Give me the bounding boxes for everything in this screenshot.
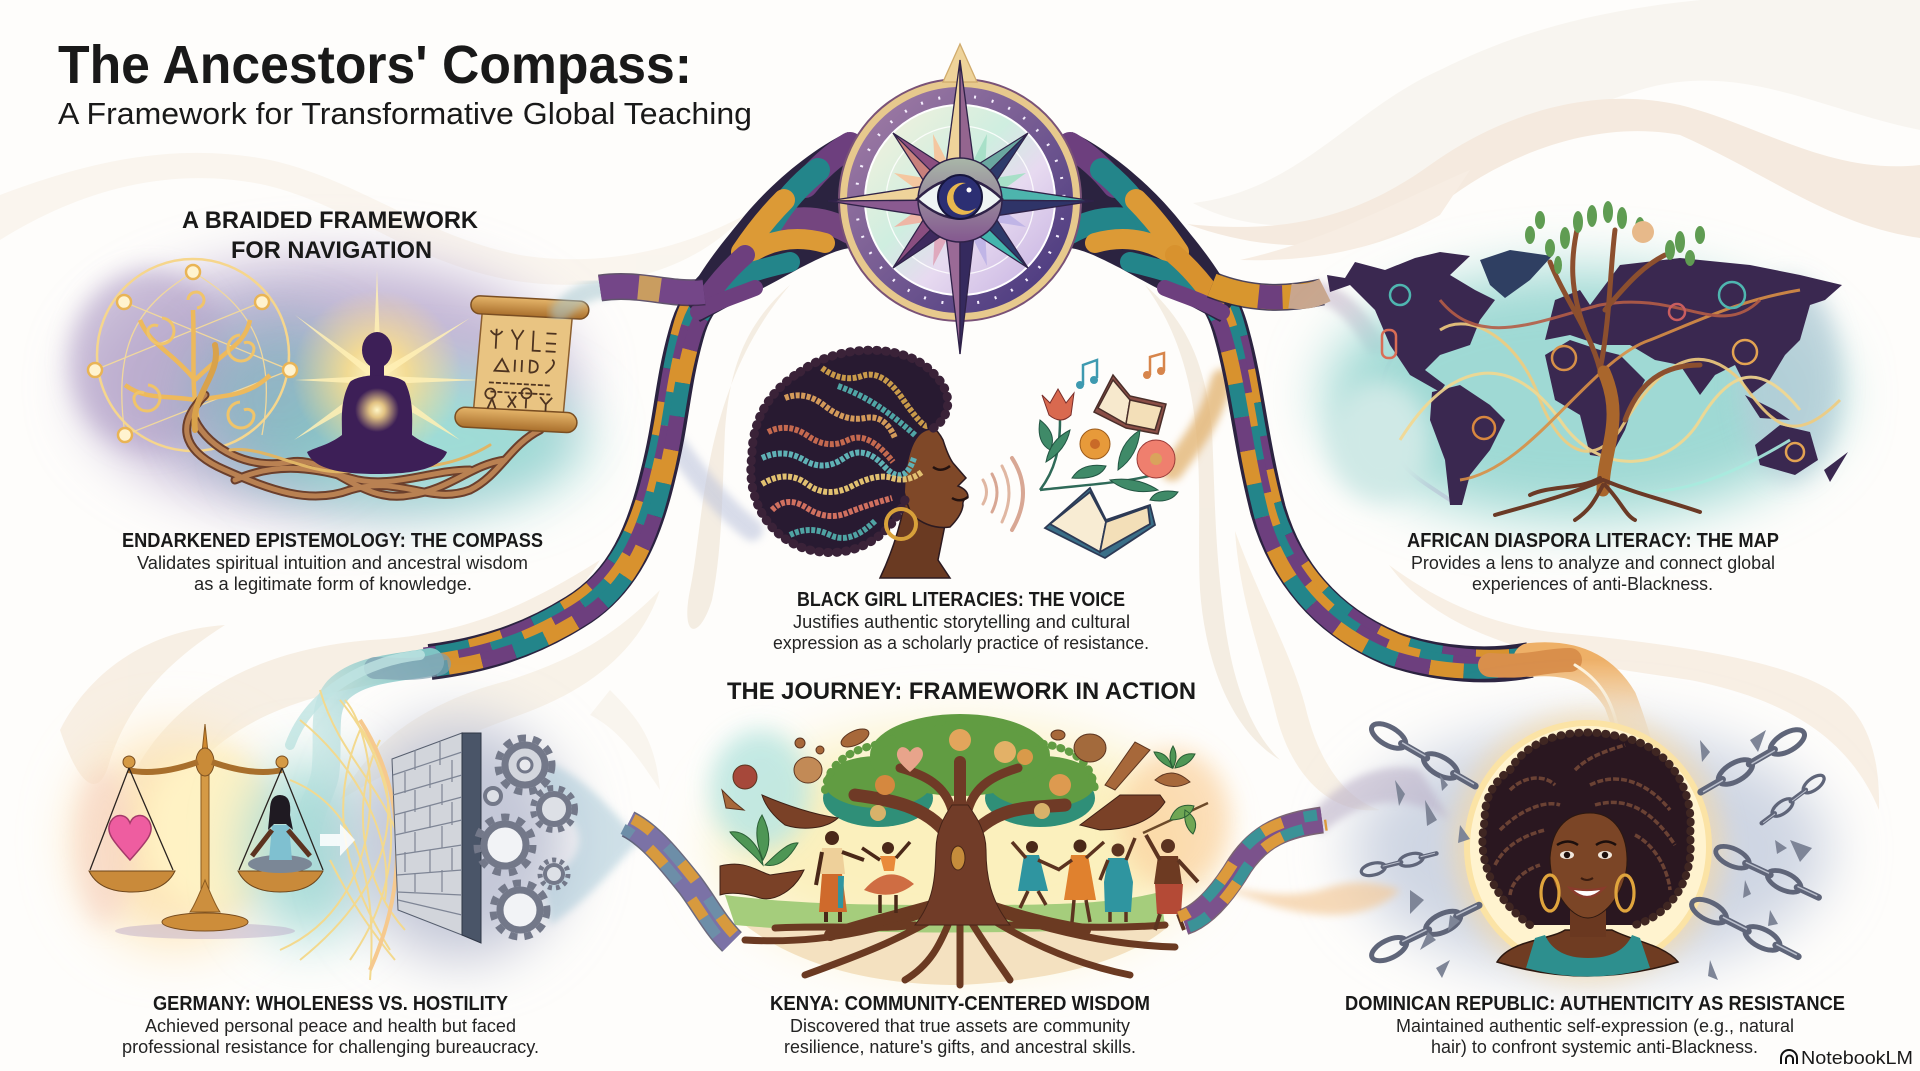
- arrow: faded strands to scroll and map: [560, 288, 1450, 530]
- braid: lower left to kenya: [623, 819, 737, 947]
- earrings: [1541, 875, 1634, 911]
- icon: ancient scroll: [455, 295, 589, 433]
- text: kenya: Discovered that true assets are community: [790, 1015, 1131, 1036]
- hair: [751, 350, 948, 553]
- braid: large left strands joining compass: [685, 132, 850, 322]
- neck and shoulders: [880, 500, 950, 578]
- compass diagonal points: [893, 133, 1028, 268]
- icon: braided roots: [187, 345, 540, 496]
- heading: a braided framework: A BRAIDED FRAMEWORK: [182, 207, 479, 234]
- canopy charms: [870, 729, 1071, 821]
- text: dominican republic: Maintained authentic self-expression (e.g., natural: [1396, 1015, 1794, 1036]
- tree on map: [1495, 225, 1700, 520]
- tree trunk: [915, 805, 1010, 925]
- icon: meditating woman: [248, 795, 312, 873]
- braid: left arc from compass: [424, 277, 722, 669]
- map continents: [1327, 250, 1848, 505]
- text: african diaspora literacy: [1407, 530, 1779, 594]
- people dancing: [816, 831, 1198, 930]
- braid: left branch to scroll: [600, 286, 704, 293]
- ground grass: [725, 892, 1165, 932]
- text: african diaspora literacy: Provides a lens to analyze and connect global: [1411, 552, 1775, 573]
- hair: [1482, 733, 1691, 925]
- braid: faded teal tail toward Germany: [290, 655, 440, 860]
- underground soil: [745, 925, 1170, 985]
- broken chain bottom left: [1368, 897, 1483, 966]
- text: african diaspora literacy: experiences of anti-Blackness.: [1472, 573, 1713, 594]
- icon: music notes: [1076, 353, 1165, 389]
- eye and lips: [933, 466, 968, 500]
- text: black girl literacies: [773, 589, 1149, 653]
- icon: top book: [1094, 375, 1166, 434]
- text: kenya: resilience, nature's gifts, and ancestral skills.: [784, 1036, 1136, 1057]
- tree canopy: [823, 714, 1096, 827]
- broken chain upper right: [1758, 772, 1827, 828]
- heading: the journey: THE JOURNEY: FRAMEWORK IN ACTION: [727, 678, 1196, 705]
- map symbols: [1382, 282, 1804, 461]
- strands between Kenya and Dominican: [1310, 767, 1450, 835]
- hands: [720, 795, 1165, 899]
- broken chain bottom right: [1688, 895, 1802, 965]
- icon: glow and rays: [292, 270, 480, 460]
- braid: right arc from compass: [1198, 277, 1536, 671]
- compass eye: [917, 158, 1002, 242]
- icon: brick wall: [392, 733, 481, 943]
- hair curls: [1495, 745, 1675, 895]
- braid: right branch to map: [1212, 285, 1325, 297]
- text: black girl literacies: Justifies authentic storytelling and cultural: [793, 611, 1130, 632]
- title: The Ancestors' Compass:: [58, 35, 692, 95]
- trunk knot: [951, 846, 965, 870]
- panel: african diaspora map illustration: [1325, 201, 1848, 520]
- broken chain top right: [1696, 725, 1808, 800]
- icon: meditating figure: [307, 332, 447, 474]
- icon: heart glow: [355, 388, 399, 432]
- icon: flowers and leaves: [1039, 389, 1178, 501]
- icon: sound waves: [983, 458, 1023, 530]
- diaspora routes: [1400, 290, 1840, 492]
- text: black girl literacies: expression as a scholarly practice of resistance.: [773, 632, 1149, 653]
- neck: [1570, 905, 1606, 937]
- heading: a braided framework: FOR NAVIGATION: [231, 237, 432, 264]
- hair word patterns: [762, 368, 927, 538]
- face: [1550, 813, 1627, 918]
- eyes mouth: [1557, 842, 1616, 897]
- stream from wall to braid: [545, 760, 640, 925]
- arrow: white arrow to wall: [320, 824, 355, 856]
- text: germany: professional resistance for challenging bureaucracy.: [122, 1036, 539, 1057]
- text: dominican republic: [1345, 993, 1845, 1057]
- braid: large right strands joining compass: [1070, 132, 1235, 322]
- text: dominican republic: DOMINICAN REPUBLIC: AUTHENTICITY AS RESISTANCE: [1345, 993, 1845, 1015]
- braid: lower right to dominican: [1179, 815, 1327, 927]
- text: endarkened epistemology: Validates spiritual intuition and ancestral wisdom: [137, 552, 528, 573]
- icon: golden tree of wisdom: [88, 259, 297, 451]
- text: african diaspora literacy: AFRICAN DIASPORA LITERACY: THE MAP: [1407, 530, 1779, 552]
- broken chain top left: [1368, 719, 1480, 794]
- compass main star: [828, 44, 1094, 354]
- broken chain middle left: [1360, 848, 1438, 878]
- compass dial: [839, 79, 1081, 321]
- text: germany: Achieved personal peace and health but faced: [145, 1015, 516, 1036]
- golden energy web: [280, 690, 405, 980]
- panel: black girl literacies illustration: [751, 350, 1178, 578]
- icon: balance scale: [89, 724, 323, 939]
- halo: [1467, 723, 1709, 971]
- panel: kenya illustration: [710, 714, 1230, 985]
- panel: dominican republic illustration: [1200, 712, 1830, 982]
- plants: [730, 746, 1208, 865]
- subtitle: A Framework for Transformative Global Teaching: [58, 96, 752, 131]
- text: endarkened epistemology: ENDARKENED EPISTEMOLOGY: THE COMPASS: [122, 530, 543, 552]
- compass faint spikes: [894, 134, 1026, 266]
- text: germany: GERMANY: WHOLENESS VS. HOSTILITY: [153, 993, 509, 1015]
- halo glow: [1453, 712, 1723, 982]
- text: germany: [122, 993, 539, 1057]
- notebooklm watermark: NotebookLM: [1801, 1048, 1913, 1068]
- braid: orange tail toward Dominican Republic: [1490, 659, 1640, 760]
- floating seeds and tools: [722, 725, 1190, 810]
- icon: gears: [477, 738, 575, 937]
- icon: bottom book: [1045, 488, 1155, 558]
- face profile: [901, 422, 968, 528]
- text: black girl literacies: BLACK GIRL LITERACIES: THE VOICE: [797, 589, 1125, 611]
- text: kenya: KENYA: COMMUNITY-CENTERED WISDOM: [770, 993, 1150, 1015]
- background flowing wisps: [0, 0, 1920, 810]
- panel: germany illustration: [75, 690, 640, 980]
- tree roots: [745, 905, 1175, 985]
- text: kenya: [770, 993, 1150, 1057]
- tree leaves: [1525, 201, 1705, 274]
- shoulders and top: [1497, 930, 1678, 976]
- text: endarkened epistemology: as a legitimate form of knowledge.: [194, 573, 472, 594]
- panel: compass: [828, 44, 1094, 354]
- icon: heart: [109, 815, 151, 860]
- earring: [886, 509, 916, 539]
- text: endarkened epistemology: [122, 530, 543, 594]
- tree branches: [855, 762, 1065, 835]
- heading: a braided framework: [182, 207, 479, 264]
- chain shards: [1395, 730, 1812, 980]
- panel: endarkened epistemology illustration: [70, 259, 589, 510]
- text: dominican republic: hair) to confront systemic anti-Blackness.: [1431, 1036, 1758, 1057]
- broken chain lower right: [1713, 842, 1822, 905]
